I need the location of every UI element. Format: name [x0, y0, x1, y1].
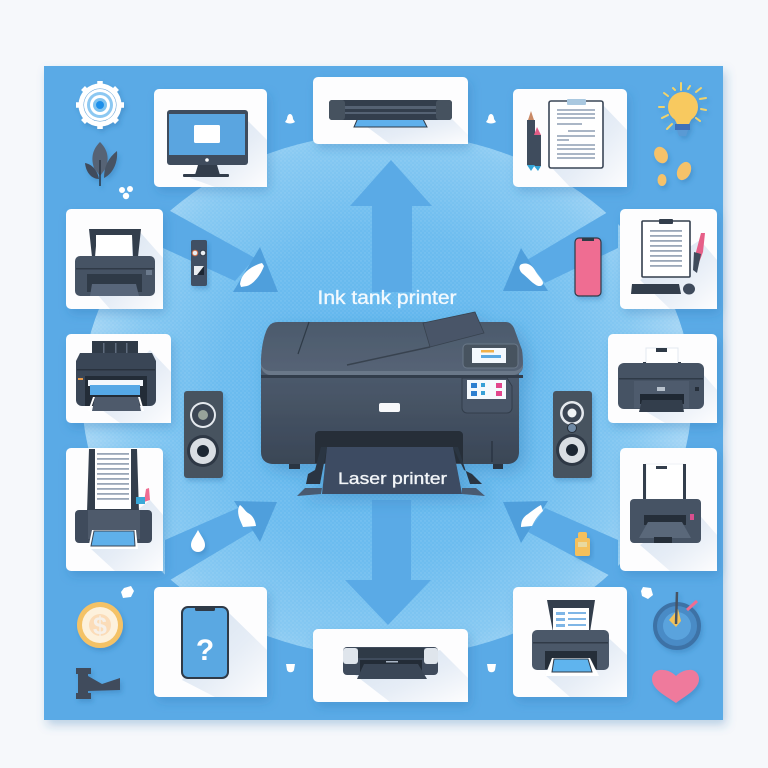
card: flatbed scanner [313, 77, 468, 144]
pencils [527, 111, 541, 171]
arrow: upper left [163, 207, 278, 292]
printer lid [261, 322, 523, 375]
arrow: upper right [503, 206, 618, 291]
arrow: down [345, 500, 431, 625]
output tray [297, 447, 485, 496]
icon: white puzzle piece left [121, 586, 134, 598]
label: ink tank printer: Ink tank printer [318, 288, 457, 309]
label: laser printer: Laser printer [338, 469, 447, 488]
card: printer right 2 [608, 334, 717, 423]
card: printer right 3 [620, 448, 717, 571]
front indicator [379, 403, 400, 412]
speaker right [553, 391, 592, 478]
central glow circle [82, 133, 692, 657]
icon: gear [76, 81, 124, 129]
icon: pink heart [652, 670, 699, 703]
icon: gold coin [77, 602, 123, 648]
card: printer left 1 [66, 209, 163, 309]
arrow: up [350, 160, 432, 292]
icon: dark tool [76, 668, 120, 699]
lower control panel [462, 378, 512, 413]
output slot [315, 431, 463, 463]
icon: yellow bottle [575, 532, 590, 556]
blue background panel [44, 66, 723, 720]
printer feet [289, 462, 503, 469]
icon: water drop [191, 530, 205, 552]
card: phone question mark [154, 587, 267, 697]
icon: pink phone [575, 238, 601, 296]
icon: dark leaf [85, 142, 117, 186]
card: printer left 3 [66, 448, 163, 571]
card: printer right 1 [620, 209, 717, 309]
arrow: lower left [165, 501, 277, 583]
printer body [261, 368, 519, 464]
scanner lid flap [347, 347, 430, 365]
main printer [261, 312, 523, 496]
icon: white dots [119, 186, 133, 199]
small white marks [285, 114, 496, 672]
icon: white puzzle piece right [641, 587, 653, 599]
document feeder [423, 312, 484, 347]
icon: remote device [191, 240, 207, 286]
upper touch screen [463, 344, 518, 368]
card: clipboard and pencils [513, 89, 627, 187]
card: desktop monitor [154, 89, 267, 187]
card: printer with document [513, 587, 627, 697]
card: phone question mark: ? [196, 634, 214, 667]
arrow: lower right [503, 501, 618, 580]
icon: circular gear pie [655, 592, 699, 648]
card: printer left 2 [66, 334, 171, 423]
speaker left [184, 391, 223, 478]
icon: gold coin: $ [93, 612, 107, 640]
icon: light bulb [659, 83, 706, 136]
icon: golden leaves [652, 145, 694, 186]
card: bottom wide printer [313, 629, 468, 702]
